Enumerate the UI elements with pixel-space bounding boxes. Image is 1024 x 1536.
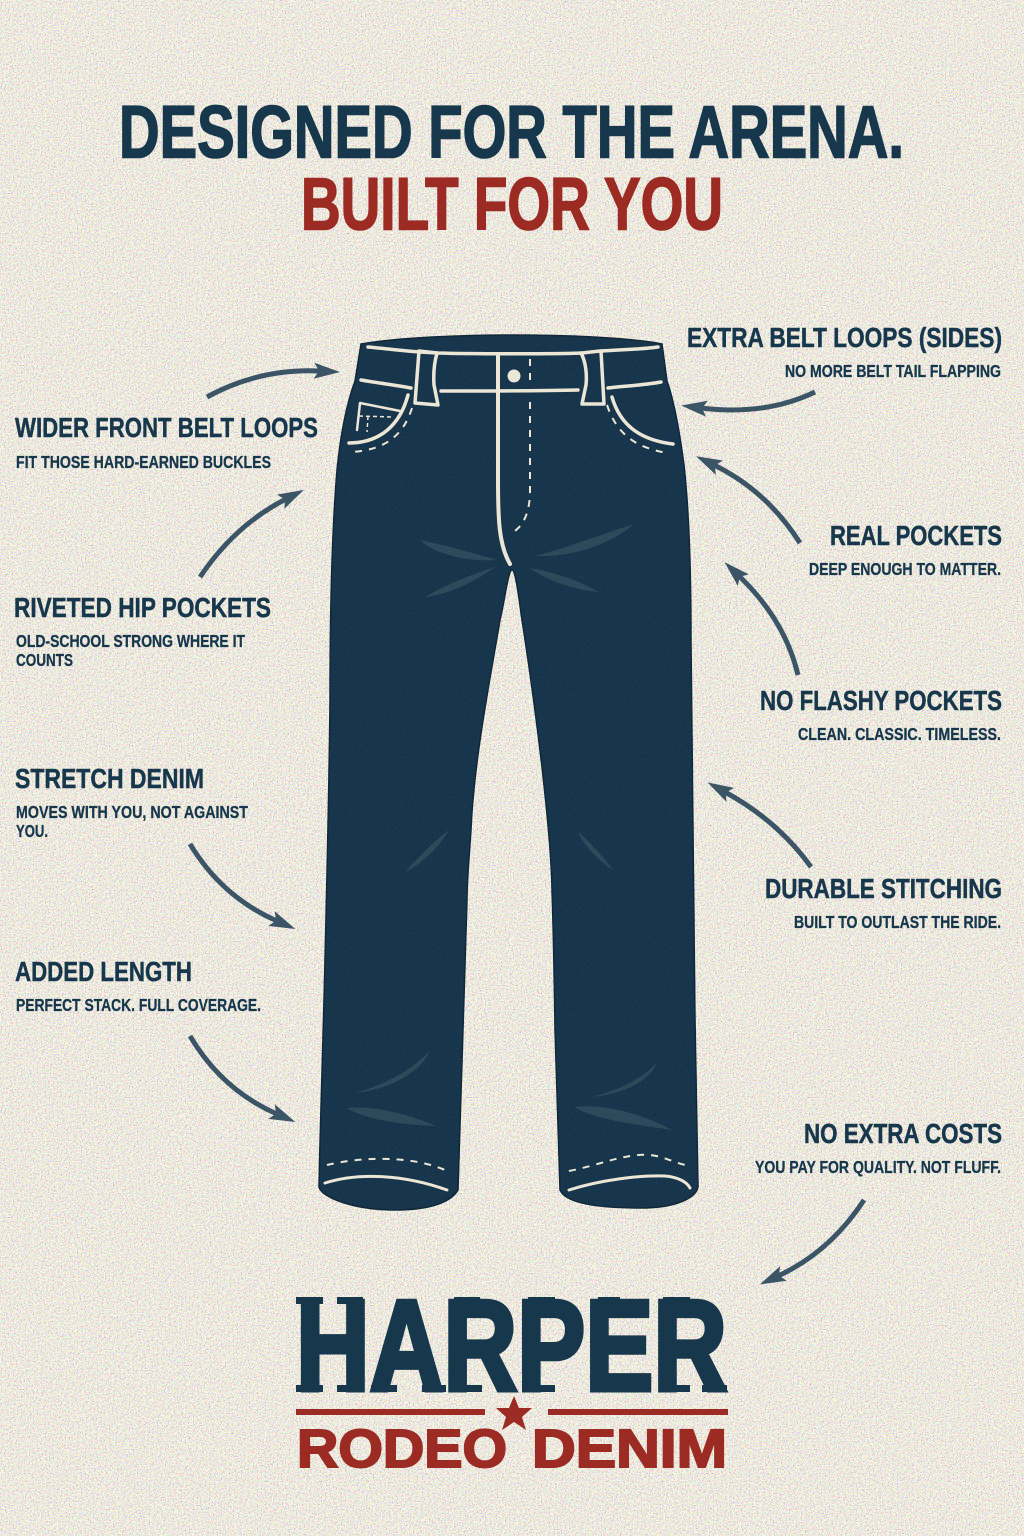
waistband — [361, 347, 661, 391]
arrow: extra belt loops — [701, 392, 815, 410]
left hem stitching — [325, 1159, 447, 1190]
icon: star — [496, 1396, 532, 1430]
arrow: riveted hip pockets — [200, 499, 286, 577]
arrow: added length — [190, 1036, 277, 1114]
jeans silhouette — [319, 335, 698, 1210]
callout: added length: PERFECT STACK. FULL COVERAGE. — [16, 995, 261, 1015]
callout: added length — [15, 956, 261, 1015]
arrow: no extra costs — [778, 1200, 864, 1276]
belt loops — [415, 351, 604, 405]
arrow: real pockets — [714, 465, 800, 543]
callout: added length: ADDED LENGTH — [15, 956, 192, 987]
callout: durable stitching — [765, 873, 1002, 932]
arrow: durable stitching — [725, 792, 811, 867]
hem folds — [347, 1050, 672, 1130]
title — [119, 90, 904, 246]
logo wordmark: Harper: HARPER — [296, 1274, 727, 1418]
title: BUILT FOR YOU — [301, 162, 723, 246]
callout: no extra costs — [755, 1118, 1002, 1177]
button and fly — [498, 354, 530, 564]
callout: stretch denim: YOU. — [16, 821, 48, 841]
callout: wider front belt loops: FIT THOSE HARD-EARNED BUCKLES — [16, 452, 271, 472]
callout: riveted hip pockets — [14, 592, 271, 670]
logo wordmark: Rodeo Denim — [297, 1419, 727, 1479]
callout: stretch denim: MOVES WITH YOU, NOT AGAINST — [16, 802, 248, 822]
illustration: jeans — [319, 335, 698, 1210]
arrow: stretch denim — [190, 844, 277, 921]
callout: riveted hip pockets: OLD-SCHOOL STRONG WHERE IT — [16, 631, 245, 651]
logo slab serifs — [296, 1297, 727, 1392]
logo rules — [296, 1409, 728, 1415]
callout: wider front belt loops — [15, 412, 318, 472]
callout: riveted hip pockets: RIVETED HIP POCKETS — [14, 592, 271, 623]
knee folds — [405, 830, 613, 872]
callout: real pockets — [809, 520, 1002, 579]
right pocket — [607, 397, 673, 453]
callout: no flashy pockets — [760, 685, 1002, 744]
denim grain — [319, 335, 698, 1210]
arrow: wider front belt loops — [207, 371, 320, 397]
right hem stitching — [569, 1155, 690, 1190]
callout: extra belt loops — [687, 322, 1002, 381]
logo wordmark: Rodeo Denim: DENIM — [532, 1419, 727, 1479]
logo wordmark: Rodeo Denim: RODEO — [297, 1419, 507, 1479]
callout: stretch denim: STRETCH DENIM — [15, 763, 204, 794]
logo: Harper Rodeo Denim — [296, 1274, 728, 1479]
callout: wider front belt loops: WIDER FRONT BELT LOOPS — [15, 412, 318, 443]
callout: riveted hip pockets: COUNTS — [16, 650, 73, 670]
callout: stretch denim — [15, 763, 248, 841]
left pocket — [349, 395, 412, 452]
crotch folds — [420, 524, 634, 597]
arrow: no flashy pockets — [739, 576, 798, 675]
